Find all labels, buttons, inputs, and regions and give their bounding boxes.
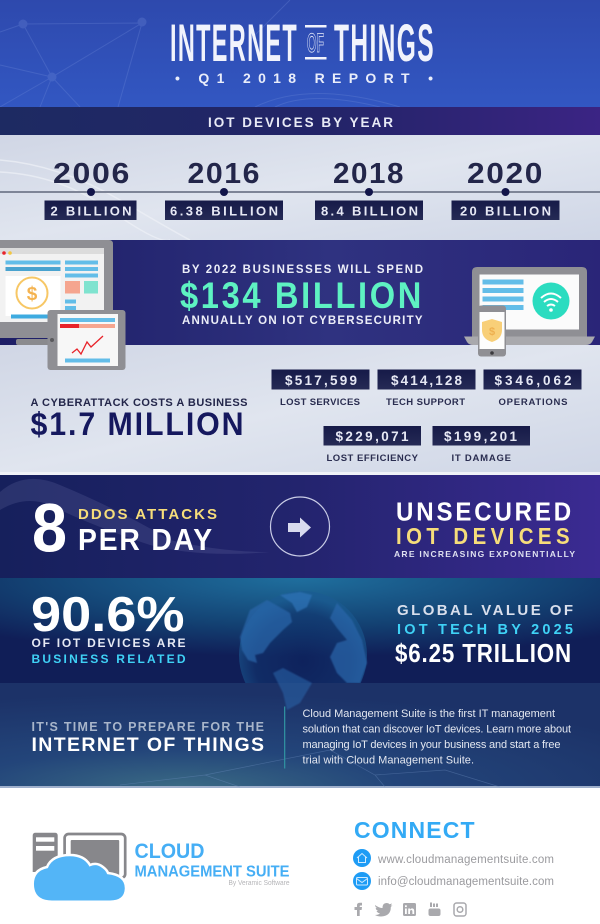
global value: GLOBAL VALUE OF [397,602,573,619]
contact: website [353,849,554,867]
cta heading light: IT'S TIME TO PREPARE FOR THE [32,720,264,734]
trillion value: $6.25 TRILLION [395,638,572,668]
year 2006 [44,158,136,220]
icon: twitter [375,903,392,916]
panel: footer [0,788,600,924]
contact: email [353,872,554,890]
cost: it damage: $199,201 [444,429,517,444]
year 2006: 2006 [53,158,131,190]
icon: phone with shield: $ [489,326,495,338]
logo icon [33,833,126,902]
cta paragraph: solution that can discover IoT devices. Learn more about [302,724,571,736]
icon: phone with shield [478,306,506,356]
stat caption: OF IOT DEVICES ARE [32,636,186,650]
cost: tech support: $414,128 [391,373,462,388]
cta paragraph: managing IoT devices in your business and start a free [302,739,560,751]
cost total: $1.7 MILLION [30,406,246,442]
cost: lost services: LOST SERVICES [280,397,360,408]
panel: call to action [0,683,600,788]
year 2016: 2016 [188,158,261,190]
cost: lost efficiency [324,426,421,464]
spend caption: ANNUALLY ON IOT CYBERSECURITY [182,315,423,327]
ddos attacks: DDOS ATTACKS [78,506,217,523]
cost: operations: $346,062 [494,373,572,388]
cost: lost efficiency: $229,071 [336,429,409,444]
cta paragraph [302,708,571,766]
subtitle: • Q1 2018 REPORT • [175,70,433,86]
icon: laptop with wifi [464,267,595,345]
stat caption accent: BUSINESS RELATED [32,652,186,666]
icon: facebook [354,903,362,916]
contact: website: www.cloudmanagementsuite.com [377,854,554,866]
spend intro: BY 2022 BUSINESSES WILL SPEND [182,264,423,276]
spend amount: $134 BILLION [180,275,424,316]
panel: header [0,0,600,107]
panel: cybersecurity spend banner [0,240,600,345]
logo wordmark: By Veramic Software [228,880,290,887]
logo wordmark [134,839,290,887]
cost: it damage [432,426,530,464]
icon: tablet with chart [48,310,126,370]
section band: IoT devices by year [0,107,600,135]
cta paragraph: trial with Cloud Management Suite. [302,754,474,766]
icon: instagram [454,903,466,916]
section band: IoT devices by year: IOT DEVICES BY YEAR [208,115,393,130]
cost: lost efficiency: LOST EFFICIENCY [326,453,419,464]
connect heading: CONNECT [354,817,474,843]
cta paragraph: Cloud Management Suite is the first IT management [302,708,555,720]
contact: email: info@cloudmanagementsuite.com [378,876,554,888]
icon: desktop monitor with dollar dashboard: $ [27,284,38,305]
per day: PER DAY [78,522,214,557]
year 2018: 8.4 BILLION [321,204,418,218]
network pattern [0,0,400,107]
cost: operations [484,370,582,408]
icon: globe [239,591,367,719]
cost: it damage: IT DAMAGE [452,453,511,464]
icon: desktop monitor with dollar dashboard [0,240,113,345]
cost: tech support [378,370,476,408]
logo wordmark: CLOUD [134,839,204,863]
icon: youtube [428,902,440,916]
arrow in circle [270,497,330,556]
panel: business related and global value [0,578,600,683]
year 2020: 2020 [467,158,544,190]
year 2016: 6.38 BILLION [170,204,278,218]
unsecured: UNSECURED [396,498,574,526]
title: OF [307,28,324,58]
panel: device timeline [0,135,600,241]
cost: operations: OPERATIONS [498,397,568,408]
panel: ddos and unsecured devices [0,475,600,578]
cost: lost services: $517,599 [285,373,357,388]
iot devices: IOT DEVICES [396,523,574,549]
year 2018 [315,158,423,220]
year 2006: 2 BILLION [50,204,132,218]
icon: linkedin [403,903,416,916]
year 2016 [165,158,283,220]
year 2020: 20 BILLION [460,204,551,218]
year 2020 [452,158,560,220]
cost intro: A CYBERATTACK COSTS A BUSINESS [30,397,248,409]
social icons [354,902,466,916]
panel: cyberattack costs [0,345,600,475]
iot tech by 2025: IOT TECH BY 2025 [397,622,573,638]
cost: lost services [272,370,370,408]
cost: tech support: TECH SUPPORT [386,397,465,408]
exponential caption: ARE INCREASING EXPONENTIALLY [394,549,575,559]
logo: cloud management suite [33,833,290,902]
title: INTERNET [170,14,298,73]
stat 90.6%: 90.6% [31,588,184,642]
year 2018: 2018 [333,158,405,190]
cta heading: INTERNET OF THINGS [32,734,264,756]
logo wordmark: MANAGEMENT SUITE [134,864,290,880]
panel: header: THINGS [334,14,435,73]
big number 8: 8 [32,490,67,566]
